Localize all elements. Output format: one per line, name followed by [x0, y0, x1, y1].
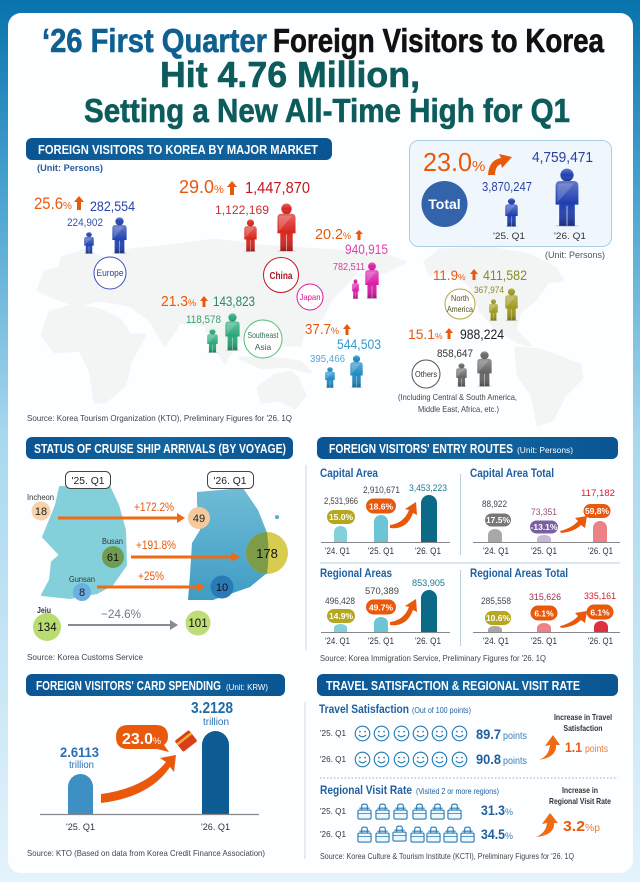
market: China: 1,122,169 — [215, 203, 269, 217]
total callout box: Total — [428, 196, 461, 212]
chart: Regional Areas — [320, 568, 450, 647]
chart: Capital Area — [320, 468, 450, 557]
bar chart: card spending: 3.2128 — [191, 700, 233, 717]
chart: Capital Area: 2,531,966 — [324, 496, 358, 507]
panel: entry routes — [317, 437, 620, 663]
bar chart: card spending: '26. Q1 — [201, 822, 230, 833]
callout: satisfaction increase — [539, 712, 612, 760]
route: Incheon: 49 — [193, 513, 205, 525]
route: Jeju: 134 — [37, 622, 57, 634]
heading: satisfaction: TRAVEL SATISFACTION & REGIONAL VISIT RATE — [326, 678, 580, 693]
icon: credit card — [175, 730, 197, 752]
market: China: 29.0 — [179, 177, 214, 197]
chart: Regional Areas: 14.9% — [329, 611, 353, 621]
chart: Capital Area Total: 17.5% — [486, 515, 510, 525]
market: China: % — [214, 184, 224, 196]
block: regional visit rate: 31.3 — [481, 802, 505, 818]
route: Incheon: +172.2% — [134, 500, 174, 514]
source: card spending: Source: KTO (Based on data from Korea Credit Finance Association) — [27, 848, 265, 858]
title — [42, 22, 605, 129]
market: Europe — [34, 194, 135, 289]
chart: Capital Area: '25. Q1 — [368, 546, 394, 557]
market: China — [179, 177, 310, 292]
callout: satisfaction increase: Increase in Travel — [554, 712, 612, 722]
total callout box: 4,759,471 — [532, 149, 593, 166]
bar chart: card spending: trillion — [203, 717, 229, 728]
route: Incheon: 18 — [35, 506, 47, 518]
market: Others: Others — [415, 369, 437, 379]
unit label: (Unit: Persons) — [37, 163, 103, 173]
map: Korea 2025 — [42, 487, 126, 598]
chart: Regional Areas Total: '24. Q1 — [483, 636, 509, 647]
callout: satisfaction increase: points — [585, 744, 608, 755]
route: Busan: 61 — [107, 552, 119, 564]
heading: satisfaction — [317, 674, 618, 696]
chart: Regional Areas Total — [470, 568, 620, 647]
callout: 23.0% — [116, 725, 169, 752]
market: Southeast Asia: 143,823 — [213, 293, 255, 309]
heading: entry routes: (Unit: Persons) — [517, 445, 573, 455]
market: Japan: 940,915 — [345, 241, 388, 257]
route: Gunsan: 8 — [79, 587, 85, 599]
chart: Regional Areas Total: '25. Q1 — [531, 636, 557, 647]
chart: Regional Areas: '25. Q1 — [368, 636, 394, 647]
bar chart: card spending: '25. Q1 — [66, 822, 95, 833]
chart: Regional Areas: '26. Q1 — [415, 636, 441, 647]
chart: Regional Areas Total: '26. Q1 — [588, 636, 613, 647]
route: Incheon: Incheon — [27, 492, 54, 502]
market: North America: % — [458, 272, 466, 282]
market: Japan: % — [343, 231, 351, 241]
market: Southeast Asia: 118,578 — [186, 314, 221, 326]
block: regional visit rate: % — [505, 807, 513, 817]
source: market: Source: Korea Tourism Organization (KTO), Preliminary Figures for '26. 1Q — [27, 413, 292, 423]
block: regional visit rate: (Visited 2 or more regions) — [416, 787, 499, 796]
arrow: card growth — [101, 755, 176, 803]
chart: Regional Areas: 853,905 — [412, 578, 445, 589]
block: travel satisfaction: points — [503, 756, 527, 767]
panel: cruise ship arrivals — [26, 437, 293, 662]
market: unlabelled blue group: 395,466 — [310, 353, 345, 365]
chart: Capital Area Total: '24. Q1 — [483, 546, 509, 557]
block: travel satisfaction — [319, 704, 527, 767]
heading: entry routes: FOREIGN VISITORS' ENTRY ROUTES — [329, 441, 513, 456]
market: Japan — [297, 226, 388, 310]
market: Europe: % — [63, 201, 72, 212]
market: Japan: 20.2 — [315, 226, 343, 243]
market: unlabelled blue group — [305, 321, 381, 388]
market: Others: 988,224 — [460, 326, 504, 342]
heading: card spending — [26, 674, 285, 696]
chart: Capital Area: '24. Q1 — [325, 546, 350, 557]
panel: visitors by major market — [26, 138, 612, 425]
chart: Regional Areas: Regional Areas — [320, 568, 392, 580]
block: regional visit rate: 34.5 — [481, 826, 505, 842]
market: Europe: 282,554 — [90, 198, 135, 214]
chart: Capital Area Total: 59,8% — [585, 506, 609, 516]
chart: Regional Areas Total: 335,161 — [584, 591, 616, 602]
chart: Capital Area Total: '26. Q1 — [588, 546, 613, 557]
route: Gunsan: Gunsan — [69, 574, 95, 584]
total callout box: 23.0 — [423, 147, 472, 177]
callout: regional rate increase: %p — [585, 823, 600, 834]
market: Europe: 224,902 — [67, 217, 103, 229]
market: Others: (Including Central & South America, — [398, 392, 517, 402]
map: Korea 2026 — [188, 488, 279, 600]
route: Gunsan — [69, 569, 234, 601]
block: travel satisfaction: Travel Satisfaction — [319, 704, 409, 716]
chart: Capital Area Total: '25. Q1 — [531, 546, 557, 557]
chart: Regional Areas: '24. Q1 — [325, 636, 350, 647]
block: regional visit rate — [320, 785, 513, 842]
bar chart: card spending: 2.6113 — [60, 744, 99, 760]
chart: Regional Areas Total: Regional Areas Total — [470, 568, 568, 580]
source: cruise: Source: Korea Customs Service — [27, 652, 143, 662]
title: ‘26 First Quarter — [42, 22, 267, 59]
chart: Regional Areas Total: 6.1% — [590, 608, 610, 618]
chart: Capital Area Total: -13.1% — [531, 522, 558, 532]
panel: card spending — [26, 674, 285, 858]
market: Others: % — [435, 331, 443, 341]
world map background — [38, 240, 582, 425]
total unit label: (Unit: Persons) — [545, 250, 605, 260]
chart: Regional Areas Total: 285,558 — [481, 596, 511, 607]
block: regional visit rate: '26. Q1 — [320, 829, 346, 839]
callout: satisfaction increase: 1.1 — [565, 739, 582, 755]
callout: regional rate increase: Increase in — [562, 785, 598, 795]
market: unlabelled blue group: % — [331, 326, 339, 336]
chart: Capital Area: Capital Area — [320, 468, 379, 480]
market: North America: America — [447, 304, 473, 314]
total callout box: '25. Q1 — [493, 231, 525, 242]
route: Busan: +191.8% — [136, 538, 176, 552]
callout: 2026 Q1: '26. Q1 — [214, 476, 247, 487]
route: Gunsan: 10 — [216, 582, 228, 594]
market: Europe: Europe — [96, 268, 124, 278]
market: Others: 858,647 — [437, 348, 473, 360]
chart: Capital Area: '26. Q1 — [415, 546, 441, 557]
chart: Regional Areas Total: 6.1% — [534, 608, 554, 618]
route: Jeju: 101 — [188, 618, 208, 630]
block: travel satisfaction: (Out of 100 points) — [412, 706, 471, 715]
market: Japan: Japan — [300, 292, 321, 302]
market: Southeast Asia: Southeast — [248, 330, 279, 340]
chart: Regional Areas Total: 315,626 — [529, 592, 561, 603]
route: Jeju: −24.6% — [101, 607, 141, 621]
callout: 23.0%: 23.0 — [122, 731, 153, 748]
route: Busan — [102, 532, 288, 574]
callout: regional rate increase: Regional Visit Rate — [549, 796, 611, 806]
chart: Capital Area: 3,453,223 — [409, 483, 447, 494]
market: North America: 411,582 — [483, 267, 527, 283]
market: North America — [433, 267, 527, 321]
route: Busan: 178 — [256, 546, 278, 561]
block: regional visit rate: Regional Visit Rate — [320, 785, 412, 797]
total callout box — [410, 140, 612, 246]
chart: Capital Area Total — [470, 468, 620, 557]
heading: entry routes — [317, 437, 618, 459]
callout: satisfaction increase: Satisfaction — [564, 723, 602, 733]
heading: major market — [26, 138, 332, 160]
market: Southeast Asia: % — [188, 298, 196, 308]
route: Incheon — [27, 492, 210, 529]
chart: Regional Areas Total: 10.6% — [486, 613, 510, 623]
market: Southeast Asia: Asia — [255, 342, 272, 352]
market: Southeast Asia: 21.3 — [161, 293, 188, 310]
market: North America: 367,974 — [474, 285, 504, 296]
block: regional visit rate: % — [505, 831, 513, 841]
chart: Capital Area Total: 117,182 — [581, 488, 615, 499]
heading: cruise: STATUS OF CRUISE SHIP ARRIVALS (BY VOYAGE) — [34, 441, 286, 456]
source: satisfaction: Source: Korea Culture & Tourism Institute (KCTI), Preliminary Figures for '26. 1Q — [320, 851, 574, 861]
block: travel satisfaction: 89.7 — [476, 726, 501, 742]
source: entry routes: Source: Korea Immigration Service, Preliminary Figures for '26. 1Q — [320, 653, 546, 663]
block: travel satisfaction: '26. Q1 — [320, 754, 346, 764]
chart: Regional Areas: 496,428 — [325, 596, 355, 607]
market: Japan: 782,511 — [333, 262, 365, 273]
total callout box: 3,870,247 — [482, 179, 532, 194]
market: Others: Middle East, Africa, etc.) — [418, 404, 499, 414]
bar chart: card spending: trillion — [69, 760, 94, 771]
callout: regional rate increase: 3.2 — [563, 818, 585, 835]
route: Gunsan: +25% — [138, 569, 164, 583]
bar chart: card spending — [40, 700, 259, 833]
market: China: China — [270, 271, 293, 282]
chart: Capital Area: 18.6% — [369, 502, 393, 512]
block: travel satisfaction: points — [503, 731, 527, 742]
callout: 23.0%: % — [153, 736, 161, 746]
heading: major market: FOREIGN VISITORS TO KOREA BY MAJOR MARKET — [38, 142, 318, 157]
block: regional visit rate: '25. Q1 — [320, 806, 346, 816]
panel: satisfaction and regional visit rate — [317, 674, 618, 861]
title: Hit 4.76 Million, — [160, 54, 420, 95]
heading: card spending: FOREIGN VISITORS' CARD SPENDING — [36, 678, 221, 693]
route: Busan: Busan — [102, 536, 123, 546]
market: North America: 11.9 — [433, 267, 458, 283]
total callout box: '26. Q1 — [554, 231, 586, 242]
market: China: 1,447,870 — [245, 180, 310, 197]
market: unlabelled blue group: 544,503 — [337, 336, 381, 352]
market: Europe: 25.6 — [34, 194, 63, 213]
callout: 2025 Q1: '25. Q1 — [72, 476, 105, 487]
block: travel satisfaction: 90.8 — [476, 751, 501, 767]
chart: Regional Areas: 570,389 — [365, 586, 399, 597]
block: travel satisfaction: '25. Q1 — [320, 728, 346, 738]
market: Southeast Asia — [161, 293, 282, 358]
heading: card spending: (Unit: KRW) — [226, 683, 268, 692]
market: North America: North — [451, 293, 469, 303]
chart: Capital Area: 15.0% — [329, 512, 353, 522]
chart: Capital Area Total: 88,922 — [482, 499, 507, 510]
callout: regional rate increase — [536, 785, 611, 837]
route: Jeju: Jeju — [37, 606, 51, 615]
market: unlabelled blue group: 37.7 — [305, 321, 331, 338]
chart: Regional Areas: 49.7% — [369, 602, 393, 612]
chart: Capital Area Total: 73,351 — [531, 507, 557, 518]
chart: Capital Area: 2,910,671 — [363, 485, 400, 496]
market: Others: 15.1 — [408, 326, 435, 342]
market: Others — [398, 326, 517, 414]
heading: cruise — [26, 437, 293, 459]
callout: 2025 Q1 — [66, 472, 110, 488]
callout: 2026 Q1 — [208, 472, 254, 488]
chart: Capital Area Total: Capital Area Total — [470, 468, 554, 480]
icon: curved growth arrow — [488, 154, 512, 175]
title: Setting a New All-Time High for Q1 — [84, 92, 570, 129]
route: Jeju — [33, 606, 210, 641]
total callout box: % — [472, 158, 485, 175]
